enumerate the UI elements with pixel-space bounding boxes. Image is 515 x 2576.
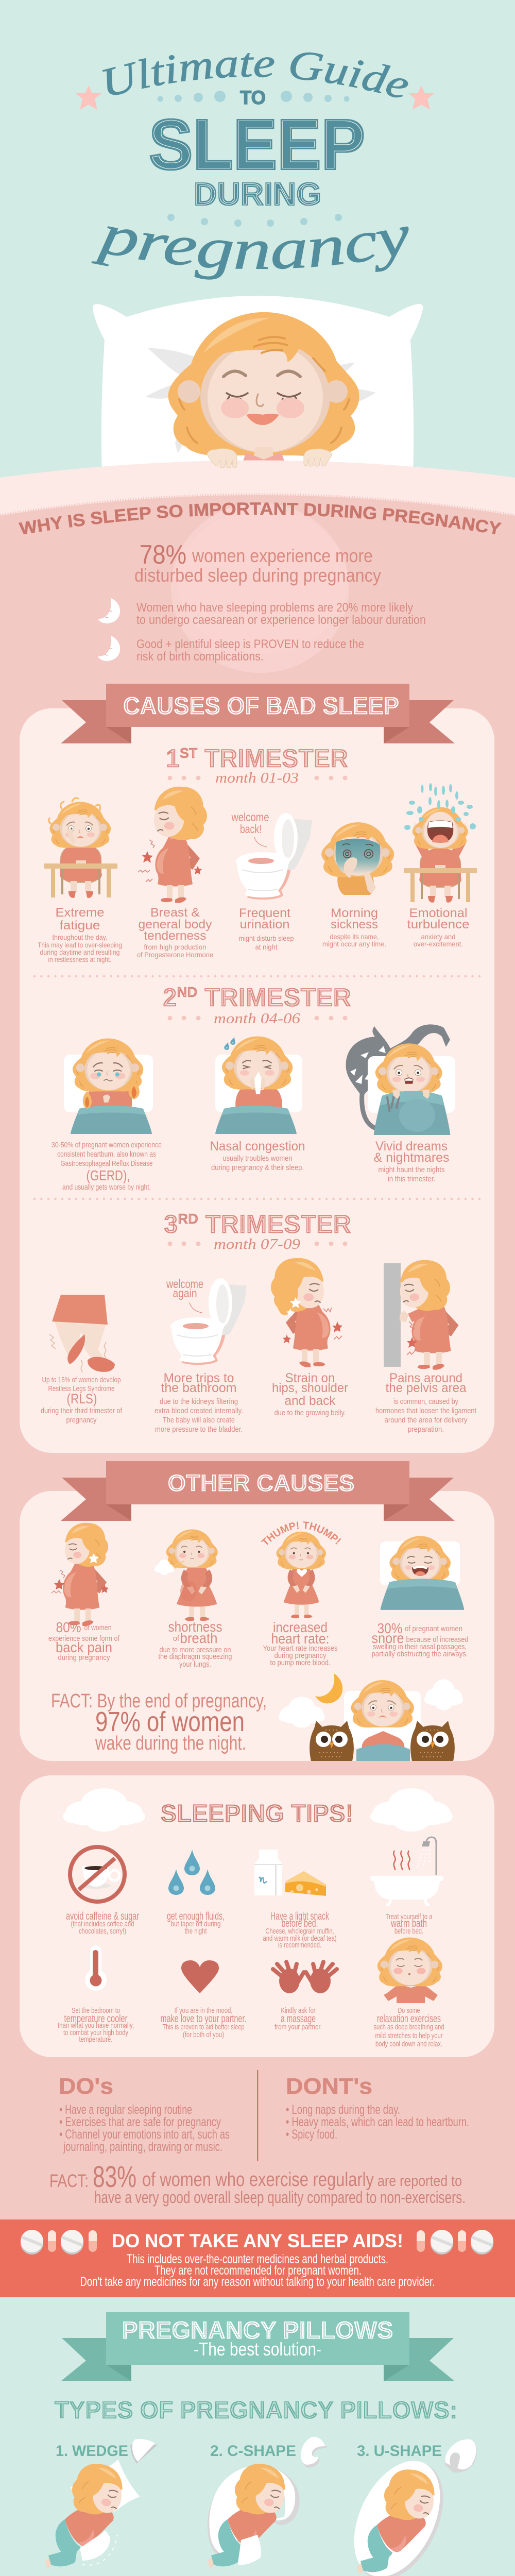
list: do's: • Have a regular sleeping routine bbox=[59, 2103, 192, 2117]
stat: 78 percent: disturbed sleep during pregnancy bbox=[134, 565, 381, 586]
tip: light snack: is recommended. bbox=[278, 1941, 321, 1950]
cause: increased heart rate: heart rate: bbox=[271, 1631, 330, 1647]
fact: sleeping problems: to undergo caesarean or experience longer labour duration bbox=[136, 613, 426, 627]
cause: vivid dreams and nightmares: in this trimester. bbox=[388, 1175, 435, 1183]
title: Ultimate Guide to Sleep During Pregnancy bbox=[76, 53, 434, 280]
cause: morning sickness bbox=[321, 822, 394, 948]
panel: sleeping tips bbox=[20, 1775, 494, 2057]
pillow type: C-shape bbox=[208, 2437, 327, 2569]
stat: 78 percent: women experience more bbox=[192, 545, 373, 566]
cause: snoring: snore bbox=[372, 1630, 404, 1646]
tip: light snack: before bed. bbox=[281, 1918, 318, 1929]
cause: strain on hips, shoulder and back: due to the growing belly. bbox=[274, 1409, 346, 1417]
fact: 97 percent of women wake during the night: 97% of women bbox=[95, 1706, 245, 1737]
cause: shortness of breath: your lungs. bbox=[179, 1660, 211, 1669]
cause: shortness of breath: breath bbox=[180, 1630, 217, 1646]
banner: pregnancy pillows: PREGNANCY PILLOWS bbox=[122, 2316, 393, 2344]
heading: 1st trimester: TRIMESTER bbox=[197, 744, 348, 773]
cause: breast and body tenderness: general body bbox=[138, 918, 212, 931]
cause: strain on hips, shoulder and back bbox=[271, 1258, 348, 1417]
banner: pregnancy pillows bbox=[61, 2312, 455, 2381]
title: Ultimate Guide to Sleep During Pregnancy: SLEEP bbox=[149, 105, 365, 184]
cause: restless legs syndrome bbox=[41, 1295, 123, 1425]
band: do not take any sleep aids: DO NOT TAKE ANY SLEEP AIDS! bbox=[112, 2230, 403, 2251]
tip: light snack: Have a light snack bbox=[270, 1910, 329, 1922]
title: Ultimate Guide to Sleep During Pregnancy: Ultimate Guide bbox=[102, 53, 408, 98]
tip: warm bath bbox=[370, 1837, 443, 1936]
cause: nasal congestion: during pregnancy & their sleep. bbox=[211, 1163, 304, 1172]
heading: 3rd trimester: TRIMESTER bbox=[198, 1210, 351, 1239]
list: do's: • Exercises that are safe for pregnancy bbox=[59, 2115, 221, 2129]
clouds bbox=[63, 1788, 453, 1832]
cause: extreme fatigue: fatigue bbox=[60, 919, 100, 933]
heading: 2nd trimester bbox=[163, 983, 351, 1027]
heading: why sleep is important: WHY IS SLEEP SO IMPORTANT DURING PREGNANCY bbox=[19, 502, 502, 535]
heading: 1st trimester: 1 bbox=[166, 744, 180, 773]
tip: make love to your partner: (for both of you) bbox=[183, 2030, 224, 2039]
heading: 2nd trimester: TRIMESTER bbox=[197, 983, 351, 1012]
cause: frequent urination bbox=[231, 810, 312, 951]
title: Ultimate Guide to Sleep During Pregnancy: TO bbox=[240, 87, 266, 108]
fact: sleeping problems: Women who have sleeping problems are 20% more likely bbox=[136, 601, 413, 615]
cause: strain on hips, shoulder and back: and back bbox=[284, 1394, 336, 1408]
pillow and sleeping woman bbox=[93, 296, 423, 474]
cause: restless legs syndrome: during their third trimester of bbox=[41, 1406, 123, 1415]
pillow type: wedge bbox=[45, 2439, 158, 2569]
heading: 1st trimester bbox=[166, 744, 348, 786]
fact: 83 percent of women exercise: are reported to bbox=[377, 2173, 462, 2190]
fact: 83 percent of women exercise: 83% bbox=[93, 2160, 136, 2194]
list: do's: • Channel your emotions into art, such as bbox=[59, 2127, 230, 2142]
cause: frequent urination: might disturb sleep bbox=[239, 934, 294, 942]
pillow type: C-shape: 2. C-SHAPE bbox=[210, 2443, 296, 2460]
cause: morning sickness: might occur any time. bbox=[322, 940, 386, 948]
cause: emotional turbulence bbox=[404, 783, 477, 948]
band: do not take any sleep aids: They are not recommended for pregnant women. bbox=[154, 2263, 362, 2278]
tip: light snack bbox=[254, 1850, 337, 1950]
panel: causes of bad sleep bbox=[20, 708, 494, 1453]
cause: extreme fatigue: during daytime and resulting bbox=[40, 948, 119, 956]
band: do not take any sleep aids: This includes over-the-counter medicines and herbal products. bbox=[127, 2252, 388, 2266]
cause: breast and body tenderness: of Progesterone Hormone bbox=[137, 951, 213, 959]
cause: vivid dreams and nightmares: might haunt the nights bbox=[378, 1165, 445, 1174]
heading: sleeping tips: SLEEPING TIPS! bbox=[161, 1800, 353, 1827]
tip: massage: from your partner. bbox=[274, 2023, 322, 2031]
tip: avoid caffeine and sugar: chocolates, sorry!) bbox=[79, 1927, 126, 1936]
tip: cooler temperature: temperature cooler bbox=[64, 2013, 128, 2025]
cause: back pain: experience some form of bbox=[48, 1634, 120, 1643]
tip: make love to your partner bbox=[161, 1960, 246, 2039]
panel: other causes bbox=[20, 1491, 494, 1761]
cause: morning sickness: sickness bbox=[331, 918, 378, 931]
banner: other causes: OTHER CAUSES bbox=[168, 1470, 354, 1496]
cause: shortness of breath bbox=[154, 1529, 232, 1669]
fact: good sleep: Good + plentiful sleep is PROVEN to reduce the bbox=[136, 637, 364, 651]
cause: snoring: swelling in their nasal passages, bbox=[373, 1642, 467, 1651]
tip: light snack: and warm milk (or decaf tea) bbox=[263, 1934, 337, 1943]
cause: strain on hips, shoulder and back: Strain on bbox=[285, 1371, 335, 1385]
cause: emotional turbulence: over-excitement. bbox=[414, 940, 463, 948]
cause: extreme fatigue bbox=[38, 798, 122, 963]
tip: cooler temperature: Set the bedroom to bbox=[72, 2006, 120, 2015]
cause: increased heart rate: to pump more blood. bbox=[270, 1658, 331, 1667]
cause: emotional turbulence: Emotional bbox=[409, 906, 468, 920]
title: Ultimate Guide to Sleep During Pregnancy: DURING bbox=[194, 177, 321, 212]
tip: fluids: but taper off during bbox=[171, 1920, 220, 1928]
cause: heartburn GERD bbox=[52, 1039, 162, 1192]
pink blanket bbox=[0, 449, 515, 2219]
tip: fluids: get enough fluids, bbox=[167, 1910, 225, 1922]
section: why is sleep so important bbox=[19, 502, 502, 673]
cause: breast and body tenderness: tenderness bbox=[144, 929, 206, 943]
tip: warm bath: before bed. bbox=[394, 1927, 423, 1936]
cause: morning sickness: despite its name, bbox=[330, 933, 379, 941]
fact: 97 percent of women wake during the night: wake during the night. bbox=[95, 1733, 246, 1754]
cause: pains around the pelvis bbox=[375, 1260, 477, 1434]
pillow type: wedge: 1. WEDGE bbox=[56, 2443, 128, 2460]
cause: extreme fatigue: This may lead to over-sleeping bbox=[38, 941, 122, 949]
heading: 3rd trimester bbox=[164, 1210, 351, 1252]
tip: relaxation exercises: mild stretches to help your bbox=[375, 2031, 443, 2040]
banner: pregnancy pillows: -The best solution- bbox=[194, 2338, 321, 2360]
tip: avoid caffeine and sugar: (that includes coffee and bbox=[71, 1920, 134, 1928]
banner: causes of bad sleep bbox=[61, 684, 455, 743]
heading: 3rd trimester: RD bbox=[178, 1211, 198, 1227]
cause: heartburn GERD: and usually gets worse by night. bbox=[62, 1183, 151, 1192]
illustration: awake woman with owls bbox=[279, 1673, 463, 1761]
cause: more trips to the bathroom: more pressure to the bladder. bbox=[155, 1425, 243, 1434]
tip: cooler temperature: temperature. bbox=[79, 2035, 112, 2044]
cause: extreme fatigue: Extreme bbox=[56, 906, 104, 920]
cause: shortness of breath: due to more pressure on bbox=[160, 1646, 231, 1654]
tip: make love to your partner: If you are in the mood, bbox=[174, 2006, 233, 2015]
cause: back pain: 80% bbox=[56, 1619, 81, 1635]
cause: shortness of breath: of bbox=[173, 1634, 180, 1643]
title: Ultimate Guide to Sleep During Pregnancy: pregnancy bbox=[91, 226, 409, 280]
tip: relaxation exercises: Do some bbox=[398, 2006, 420, 2015]
fact: 97 percent of women wake during the night: FACT: By the end of pregnancy, bbox=[51, 1690, 267, 1712]
list: dont's: DONT's bbox=[286, 2074, 372, 2099]
list: dont's bbox=[286, 2074, 469, 2142]
tip: warm bath: Treat yourself to a bbox=[385, 1912, 433, 1921]
cause: frequent urination: welcome bbox=[231, 810, 269, 824]
cause: more trips to the bathroom: due to the kidneys filtering bbox=[160, 1397, 238, 1406]
list: do's: journaling, painting, drawing or music. bbox=[63, 2140, 222, 2154]
cause: nasal congestion bbox=[210, 1036, 305, 1172]
cause: frequent urination: Frequent bbox=[239, 906, 290, 920]
heading: 1st trimester: month 01-03 bbox=[215, 770, 299, 786]
cause: nasal congestion: usually troubles women bbox=[222, 1154, 293, 1163]
cause: restless legs syndrome: Restless Legs Syndrome bbox=[48, 1384, 114, 1393]
list: do's: DO's bbox=[59, 2074, 113, 2099]
tip: relaxation exercises: body cool down and relax. bbox=[375, 2040, 442, 2048]
fact: 83 percent of women exercise: of women who exercise regularly bbox=[142, 2169, 374, 2191]
cause: frequent urination: at night bbox=[255, 943, 278, 951]
cause: snoring: 30% bbox=[377, 1620, 403, 1636]
heading: 3rd trimester: month 07-09 bbox=[214, 1236, 300, 1252]
tip: avoid caffeine and sugar bbox=[66, 1847, 139, 1936]
tip: cooler temperature: to combat your high body bbox=[63, 2028, 128, 2037]
tip: massage: Kindly ask for bbox=[281, 2006, 315, 2015]
tip: fluids: the night bbox=[184, 1927, 207, 1936]
cause: snoring: of pregnant women bbox=[405, 1624, 462, 1633]
cause: more trips to the bathroom: The baby will also create bbox=[163, 1416, 235, 1425]
cause: restless legs syndrome: Up to 15% of women develop bbox=[42, 1376, 121, 1384]
fact: good sleep bbox=[98, 636, 364, 664]
cause: restless legs syndrome: pregnancy bbox=[66, 1416, 97, 1425]
stat: 78 percent bbox=[134, 540, 381, 586]
tip: cooler temperature bbox=[58, 1945, 134, 2044]
cause: more trips to the bathroom: the bathroom bbox=[161, 1381, 237, 1395]
cause: more trips to the bathroom bbox=[154, 1277, 247, 1434]
heading: 2nd trimester: 2 bbox=[163, 983, 177, 1012]
cause: increased heart rate: Your heart rate increases bbox=[263, 1644, 338, 1653]
cause: more trips to the bathroom: extra blood created internally. bbox=[154, 1406, 243, 1415]
cause: heartburn GERD: 30-50% of pregnant women experience bbox=[52, 1141, 162, 1149]
tip: cooler temperature: than what you have normally, bbox=[58, 2021, 134, 2030]
cause: vivid dreams and nightmares bbox=[346, 1024, 455, 1183]
fact: sleeping problems bbox=[98, 598, 426, 627]
banner: other causes bbox=[61, 1461, 455, 1521]
tip: relaxation exercises: relaxation exercises bbox=[377, 2013, 441, 2025]
tip: avoid caffeine and sugar: avoid caffeine & sugar bbox=[66, 1910, 139, 1922]
cause: snoring: because of increased bbox=[406, 1635, 469, 1644]
fact: good sleep: risk of birth complications. bbox=[136, 650, 264, 664]
cause: increased heart rate: during pregnancy bbox=[274, 1651, 327, 1660]
heading: 2nd trimester: ND bbox=[177, 984, 197, 1000]
heading: 1st trimester: ST bbox=[180, 745, 197, 761]
list: do's bbox=[59, 2074, 230, 2154]
cause: more trips to the bathroom: again bbox=[173, 1286, 197, 1300]
cause: strain on hips, shoulder and back: hips, shoulder bbox=[272, 1381, 348, 1395]
cause: heartburn GERD: Gastroesophageal Reflux Disease bbox=[61, 1159, 152, 1168]
cause: extreme fatigue: in restlessness at night. bbox=[48, 955, 111, 963]
list: dont's: • Long naps during the day. bbox=[286, 2103, 400, 2117]
tip: warm bath: warm bath bbox=[390, 1918, 427, 1929]
tip: fluids bbox=[167, 1850, 225, 1936]
fact: 83 percent of women exercise bbox=[49, 2160, 466, 2207]
list: dont's: • Spicy food. bbox=[286, 2127, 337, 2142]
cause: increased heart rate: THUMP! THUMP! bbox=[261, 1521, 341, 1545]
tip: relaxation exercises: such as deep breathing and bbox=[374, 2023, 444, 2031]
cause: frequent urination: urination bbox=[240, 918, 289, 931]
fact: 83 percent of women exercise: FACT: bbox=[49, 2171, 89, 2191]
heading: 3rd trimester: 3 bbox=[164, 1210, 178, 1239]
cause: pains around the pelvis: is common, caused by bbox=[393, 1397, 458, 1406]
cause: breast and body tenderness: Breast & bbox=[150, 906, 200, 920]
cause: snoring bbox=[372, 1536, 469, 1658]
cause: heartburn GERD: (GERD), bbox=[87, 1167, 130, 1183]
cause: morning sickness: Morning bbox=[331, 906, 378, 920]
tip: light snack: Cheese, wholegrain muffin, bbox=[266, 1927, 334, 1936]
cause: restless legs syndrome: (RLS) bbox=[67, 1391, 97, 1406]
cause: frequent urination: back! bbox=[240, 822, 262, 836]
cause: emotional turbulence: turbulence bbox=[407, 918, 470, 931]
tip: make love to your partner: make love to your partner. bbox=[161, 2013, 246, 2025]
cause: pains around the pelvis: Pains around bbox=[389, 1371, 462, 1385]
cause: shortness of breath: shortness bbox=[168, 1619, 222, 1635]
cause: back pain: of women bbox=[84, 1623, 111, 1632]
cause: breast and body tenderness: from high production bbox=[144, 943, 206, 951]
pillow type: U-shape: 3. U-SHAPE bbox=[357, 2443, 442, 2460]
tip: make love to your partner: This is proven to aid better sleep bbox=[163, 2023, 244, 2031]
cause: more trips to the bathroom: welcome bbox=[166, 1277, 203, 1291]
cause: increased heart rate bbox=[261, 1521, 341, 1667]
tip: relaxation exercises bbox=[374, 1938, 444, 2048]
cause: pains around the pelvis: around the area for delivery bbox=[384, 1416, 468, 1425]
pillow type: U-shape bbox=[337, 2439, 477, 2576]
tip: massage: a massage bbox=[281, 2013, 316, 2025]
cause: shortness of breath: the diaphragm squeezing bbox=[159, 1652, 232, 1661]
cause: nasal congestion: Nasal congestion bbox=[210, 1139, 305, 1154]
cause: extreme fatigue: throughout the day. bbox=[53, 933, 107, 941]
tip: massage bbox=[273, 1962, 337, 2031]
cause: vivid dreams and nightmares: & nightmares bbox=[374, 1150, 449, 1165]
stat: 78 percent: 78% bbox=[140, 540, 186, 570]
cause: pains around the pelvis: hormones that loosen the ligament bbox=[375, 1406, 477, 1415]
cause: increased heart rate: increased bbox=[273, 1619, 328, 1635]
cause: snoring: partially obstructing the airways. bbox=[372, 1650, 468, 1658]
heading: types of pregnancy pillows: TYPES OF PREGNANCY PILLOWS: bbox=[55, 2396, 457, 2424]
heading: 2nd trimester: month 04-06 bbox=[214, 1011, 300, 1027]
cause: breast and body tenderness bbox=[137, 787, 213, 959]
band: do not take any sleep aids bbox=[0, 2219, 515, 2297]
cause: pains around the pelvis: preparation. bbox=[408, 1425, 444, 1434]
cause: back pain: during pregnancy bbox=[58, 1653, 110, 1662]
cause: back pain bbox=[48, 1523, 120, 1662]
cause: pains around the pelvis: the pelvis area bbox=[385, 1381, 467, 1395]
cause: heartburn GERD: consistent heartburn, also known as bbox=[57, 1150, 156, 1159]
fact: 97 percent of women wake during the night bbox=[51, 1690, 267, 1754]
cause: more trips to the bathroom: More trips to bbox=[164, 1371, 234, 1385]
cause: emotional turbulence: anxiety and bbox=[421, 933, 455, 941]
banner: causes of bad sleep: CAUSES OF BAD SLEEP bbox=[123, 692, 399, 719]
cause: back pain: back pain bbox=[56, 1639, 112, 1655]
cause: vivid dreams and nightmares: Vivid dreams bbox=[375, 1139, 448, 1154]
